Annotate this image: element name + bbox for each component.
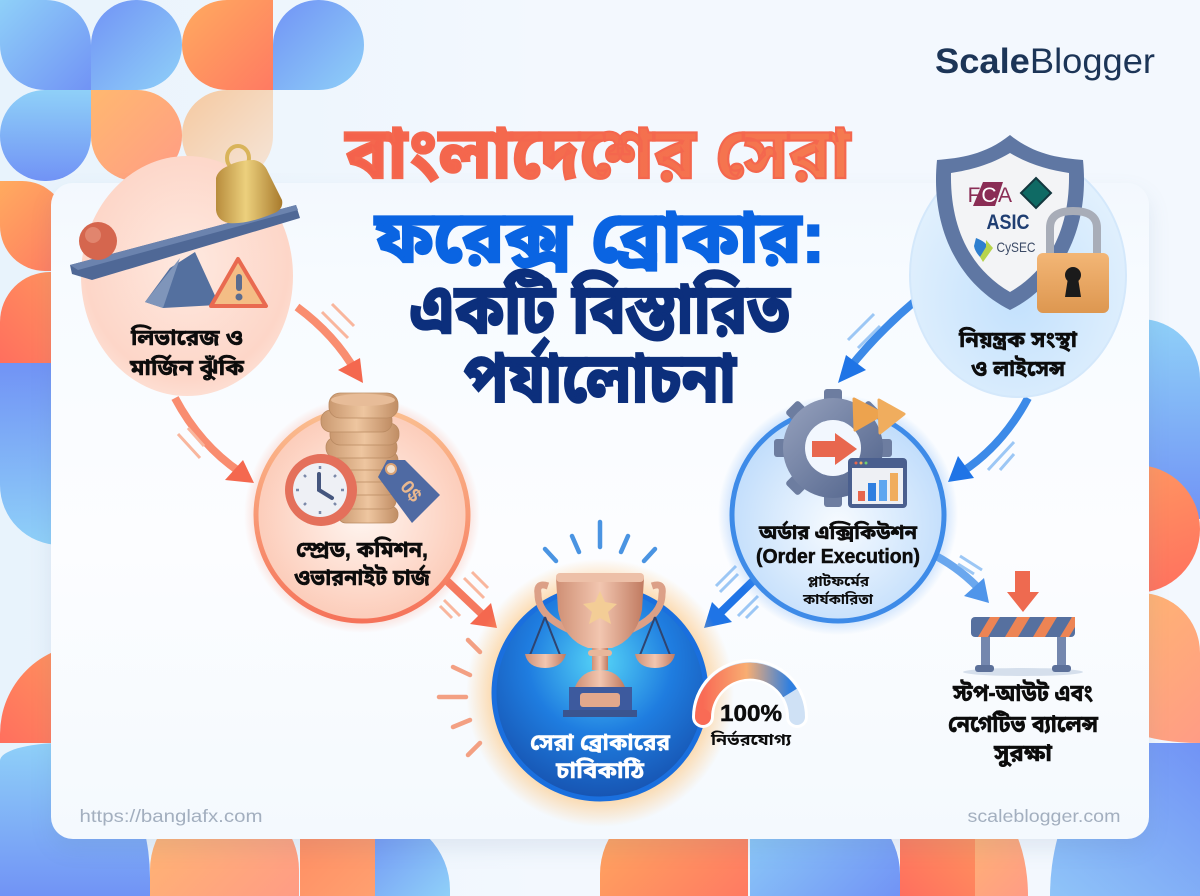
title line 2: ফরেক্স ব্রোকার:: [374, 198, 825, 278]
icon: seesaw with weight, ball and warning: [70, 146, 300, 308]
price tag: [378, 460, 440, 523]
logo: ScaleBlogger: [935, 42, 1155, 81]
price tag: 0$: [396, 477, 425, 507]
title line 1: বাংলাদেশের সেরা: [345, 114, 852, 194]
node: trophy, key to best broker: চাবিকাঠি: [555, 756, 645, 783]
node: order execution: কার্যকারিতা: [802, 590, 874, 607]
panel background: [732, 409, 944, 621]
icon: gear with arrows and chart window: [774, 389, 907, 508]
regulator: FCA: C: [981, 184, 997, 207]
gauge: 100% reliable: [695, 670, 797, 749]
node: order execution: প্লাটফর্মের: [807, 572, 870, 589]
regulator: FCA: [968, 182, 1012, 207]
label: সেরা ব্রোকারের: [530, 729, 671, 755]
title line 4: পর্যালোচনা: [464, 337, 737, 417]
arrow: leverage to costs (lower): [175, 398, 254, 483]
node: regulators and licences: [910, 135, 1126, 397]
footer url left: https://banglafx.com: [80, 806, 262, 826]
panel background: [910, 153, 1126, 397]
icon: coin stack with clock and price tag: [285, 393, 440, 526]
label: নিয়ন্ত্রক সংস্থা: [958, 327, 1078, 352]
node: stop-out and negative balance protection: [948, 571, 1099, 767]
node: leverage and margin risk: মার্জিন ঝুঁকি: [129, 354, 245, 381]
footer url right: scaleblogger.com: [968, 806, 1120, 826]
panel background: [256, 409, 468, 621]
title: [345, 114, 852, 417]
arrow: regulators to execution (upper): [838, 302, 914, 383]
clock: [285, 454, 357, 526]
gauge arc: [703, 670, 797, 717]
node: order execution: (Order Execution): [756, 546, 920, 568]
node: stop-out and negative balance protection: সুরক্ষা: [993, 740, 1053, 767]
gauge value: 100%: [720, 700, 782, 726]
panel background: [494, 587, 706, 799]
regulator: CySEC: CySEC: [996, 239, 1036, 255]
icon: trophy with scales: [525, 573, 675, 717]
main white card: [51, 183, 1149, 839]
label: লিভারেজ ও: [130, 325, 243, 350]
regulator: diamond logo: [1021, 178, 1051, 208]
regulator: ASIC: ASIC: [986, 211, 1030, 234]
arrow: execution to trophy: [704, 566, 758, 628]
gauge caption: নির্ভরযোগ্য: [710, 730, 792, 749]
regulator: FCA: A: [998, 184, 1012, 207]
node: stop-out and negative balance protection: নেগেটিভ ব্যালেন্স: [948, 710, 1099, 738]
arrow: costs to trophy: [440, 572, 497, 628]
node: trophy, key to best broker: [439, 522, 734, 827]
regulator: FCA: F: [968, 184, 980, 207]
label: অর্ডার এক্সিকিউশন: [758, 520, 918, 544]
node: leverage and margin risk: [70, 146, 300, 396]
icon: shield with regulators and padlock: [936, 135, 1109, 313]
label: স্প্রেড, কমিশন,: [296, 537, 428, 562]
node: spreads and charges: ওভারনাইট চার্জ: [294, 564, 431, 590]
icon: rays: [545, 522, 655, 561]
arrow: regulators to execution (lower): [948, 398, 1028, 482]
label: স্টপ-আউট এবং: [952, 679, 1093, 707]
arrow: leverage to costs (upper): [297, 304, 363, 383]
arrow: execution to stop-out: [936, 556, 989, 603]
regulator: CySEC: [974, 238, 1036, 262]
title line 3: একটি বিস্তারিত: [410, 269, 791, 348]
panel background: [81, 156, 293, 396]
node: order execution: [718, 389, 958, 635]
node: spreads and charges: [244, 393, 480, 633]
node: regulators and licences: ও লাইসেন্স: [971, 356, 1065, 381]
icon: barrier with down arrow: [963, 571, 1083, 676]
